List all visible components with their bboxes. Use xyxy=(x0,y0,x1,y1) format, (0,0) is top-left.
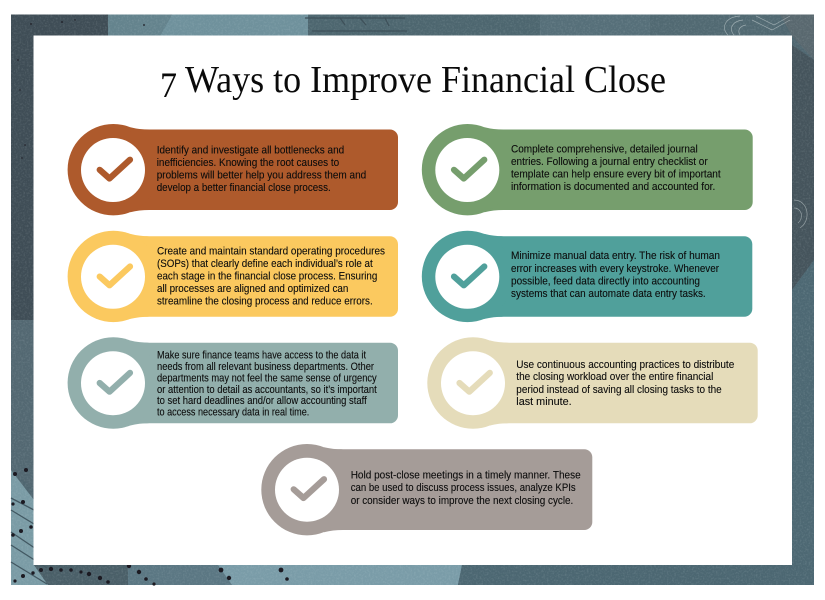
card 1 text xyxy=(157,145,366,194)
card 3: standard operating procedures xyxy=(68,231,398,322)
icon: check mark xyxy=(454,160,484,178)
card 3 text: streamline the closing process and reduce errors. xyxy=(157,296,373,308)
card 5 text: or attention to detail as accountants, so it’s important xyxy=(157,384,377,396)
card 6 text: Use continuous accounting practices to distribute xyxy=(516,359,734,371)
card 4 text: systems that can automate data entry tasks. xyxy=(511,288,706,300)
card 6 text: last minute. xyxy=(516,396,572,408)
card 3 text xyxy=(157,246,385,308)
card 1: bottlenecks xyxy=(68,124,398,215)
card 5 text: Make sure finance teams have access to the data it xyxy=(157,350,366,362)
card 1 text: problems will better help you address them and xyxy=(157,170,366,182)
card 6: continuous accounting xyxy=(427,337,758,429)
card 5 text xyxy=(157,350,377,418)
icon: check mark xyxy=(454,266,484,285)
card 4: manual data entry xyxy=(422,231,752,322)
icon: check mark xyxy=(100,266,130,285)
icon: check mark xyxy=(460,373,490,392)
card 2 text: entries. Following a journal entry checklist or xyxy=(511,156,708,168)
icon: check mark xyxy=(100,160,130,178)
card 2 text: Complete comprehensive, detailed journal xyxy=(511,144,698,156)
card 4 text: Minimize manual data entry. The risk of human xyxy=(511,250,720,262)
card 6 text: period instead of saving all closing tasks to the xyxy=(516,384,722,396)
icon: check mark xyxy=(294,479,324,498)
card 6 text xyxy=(516,359,734,408)
card 1 text: inefficiencies. Knowing the root causes to xyxy=(157,157,339,169)
card 7 text xyxy=(351,470,581,507)
card 7 text: Hold post-close meetings in a timely manner. These xyxy=(351,470,581,482)
card 3 text: all processes are aligned and optimized can xyxy=(157,283,348,295)
card 3 text: Create and maintain standard operating procedures xyxy=(157,246,385,258)
card 5 text: to set hard deadlines and/or allow accounting staff xyxy=(157,395,367,407)
card 4 text xyxy=(511,250,720,300)
card 6 text: the closing workload over the entire financial xyxy=(516,371,713,383)
card 5 text: needs from all relevant business departments. Other xyxy=(157,361,374,373)
card 5 text: departments may not feel the same sense of urgency xyxy=(157,372,377,384)
card 7 text: can be used to discuss process issues, analyze KPIs xyxy=(351,482,576,494)
card 5 text: to access necessary data in real time. xyxy=(157,406,309,418)
title: 7 xyxy=(160,65,177,105)
card 3 text: (SOPs) that clearly define each individual’s role at xyxy=(157,258,373,270)
card 1 text: Identify and investigate all bottlenecks and xyxy=(157,145,344,157)
icon: check mark xyxy=(100,373,130,392)
title: Ways to Improve Financial Close xyxy=(185,59,666,101)
card 2 text xyxy=(511,144,721,193)
card 5: finance team data access xyxy=(68,337,398,429)
card 2: journal entries xyxy=(422,124,753,215)
card 4 text: possible, feed data directly into accounting xyxy=(511,276,700,288)
card 7: post-close meetings xyxy=(261,444,592,535)
card 1 text: develop a better financial close process. xyxy=(157,182,331,194)
card 3 text: each stage in the financial close process. Ensuring xyxy=(157,270,377,282)
card 2 text: information is documented and accounted for. xyxy=(511,181,715,193)
card 7 text: or consider ways to improve the next closing cycle. xyxy=(351,495,573,507)
card 2 text: template can help ensure every bit of important xyxy=(511,169,721,181)
card 4 text: error increases with every keystroke. Whenever xyxy=(511,263,719,275)
